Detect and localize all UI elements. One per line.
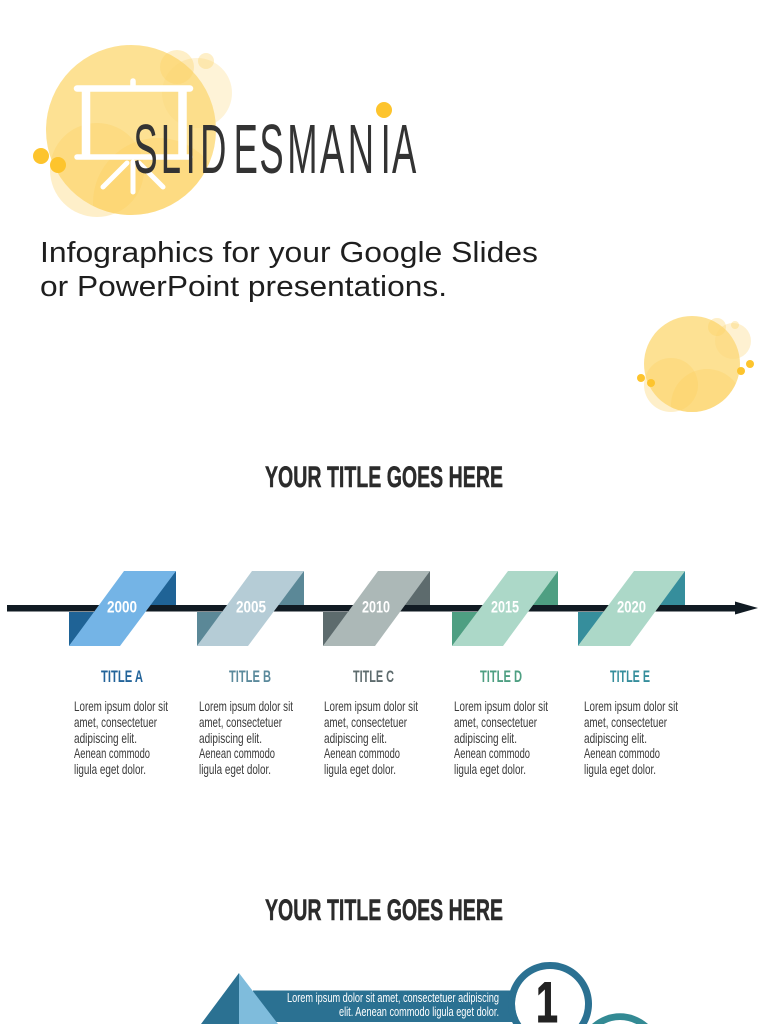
heading: second section: YOUR TITLE GOES HERE xyxy=(265,894,503,927)
text block D xyxy=(454,698,548,777)
title D: TITLE D xyxy=(480,667,522,686)
text block D: amet, consectetuer xyxy=(454,714,537,730)
logo dots xyxy=(33,102,392,173)
icon: presentation screen xyxy=(77,81,190,192)
number circle 1 ring xyxy=(508,962,592,1024)
banner bar xyxy=(253,990,518,1022)
text block A xyxy=(74,698,168,777)
text block D: Lorem ipsum dolor sit xyxy=(454,698,548,714)
text block B: ligula eget dolor. xyxy=(199,761,271,777)
text block E: Lorem ipsum dolor sit xyxy=(584,698,678,714)
text block B: Aenean commodo xyxy=(199,745,275,761)
timeline item: 2000: 2000 xyxy=(107,598,137,616)
timeline item: 2005: 2005 xyxy=(236,598,266,616)
text block C: adipiscing elit. xyxy=(324,730,387,746)
title C: TITLE C xyxy=(353,667,394,686)
logo wordmark: SLIDESMANIA xyxy=(133,110,417,188)
text block C: amet, consectetuer xyxy=(324,714,407,730)
text block C xyxy=(324,698,418,777)
text block C: Lorem ipsum dolor sit xyxy=(324,698,418,714)
text block A: amet, consectetuer xyxy=(74,714,157,730)
timeline item: 2000 xyxy=(69,571,176,646)
timeline item: 2010 xyxy=(323,571,430,646)
logo xyxy=(33,45,416,217)
text block A: Aenean commodo xyxy=(74,745,150,761)
heading: timeline: YOUR TITLE GOES HERE xyxy=(265,461,503,494)
banner text: Lorem ipsum dolor sit amet, consectetuer adipiscing xyxy=(287,991,499,1005)
text block E: adipiscing elit. xyxy=(584,730,647,746)
subtitle xyxy=(40,237,538,303)
logo background circles xyxy=(46,45,232,217)
timeline item: 2020 xyxy=(578,571,685,646)
text block C: Aenean commodo xyxy=(324,745,400,761)
title A: TITLE A xyxy=(101,667,143,686)
text block A: adipiscing elit. xyxy=(74,730,137,746)
text block B: amet, consectetuer xyxy=(199,714,282,730)
subtitle: Infographics for your Google Slides xyxy=(40,237,538,269)
title E: TITLE E xyxy=(610,667,650,686)
timeline item: 2015: 2015 xyxy=(491,598,519,616)
text block E: amet, consectetuer xyxy=(584,714,667,730)
timeline item: 2005 xyxy=(197,571,304,646)
title B: TITLE B xyxy=(229,667,271,686)
text block A: ligula eget dolor. xyxy=(74,761,146,777)
text block E: Aenean commodo xyxy=(584,745,660,761)
decorative yellow circle cluster xyxy=(637,316,754,412)
text block E xyxy=(584,698,678,777)
text block D: ligula eget dolor. xyxy=(454,761,526,777)
text block E: ligula eget dolor. xyxy=(584,761,656,777)
banner text: elit. Aenean commodo ligula eget dolor. xyxy=(339,1005,499,1019)
text block D: adipiscing elit. xyxy=(454,730,517,746)
pyramid xyxy=(201,973,278,1024)
number circle 2 ring xyxy=(592,1013,648,1024)
timeline item: 2015 xyxy=(452,571,558,646)
banner text xyxy=(287,991,499,1019)
text block B: Lorem ipsum dolor sit xyxy=(199,698,293,714)
text block B xyxy=(199,698,293,777)
step 1 banner xyxy=(201,962,592,1024)
subtitle: or PowerPoint presentations. xyxy=(40,271,447,303)
text block A: Lorem ipsum dolor sit xyxy=(74,698,168,714)
timeline item: 2020: 2020 xyxy=(617,598,646,616)
timeline item: 2010: 2010 xyxy=(362,598,390,616)
timeline arrow xyxy=(7,602,758,614)
text block B: adipiscing elit. xyxy=(199,730,262,746)
text block C: ligula eget dolor. xyxy=(324,761,396,777)
text block D: Aenean commodo xyxy=(454,745,530,761)
